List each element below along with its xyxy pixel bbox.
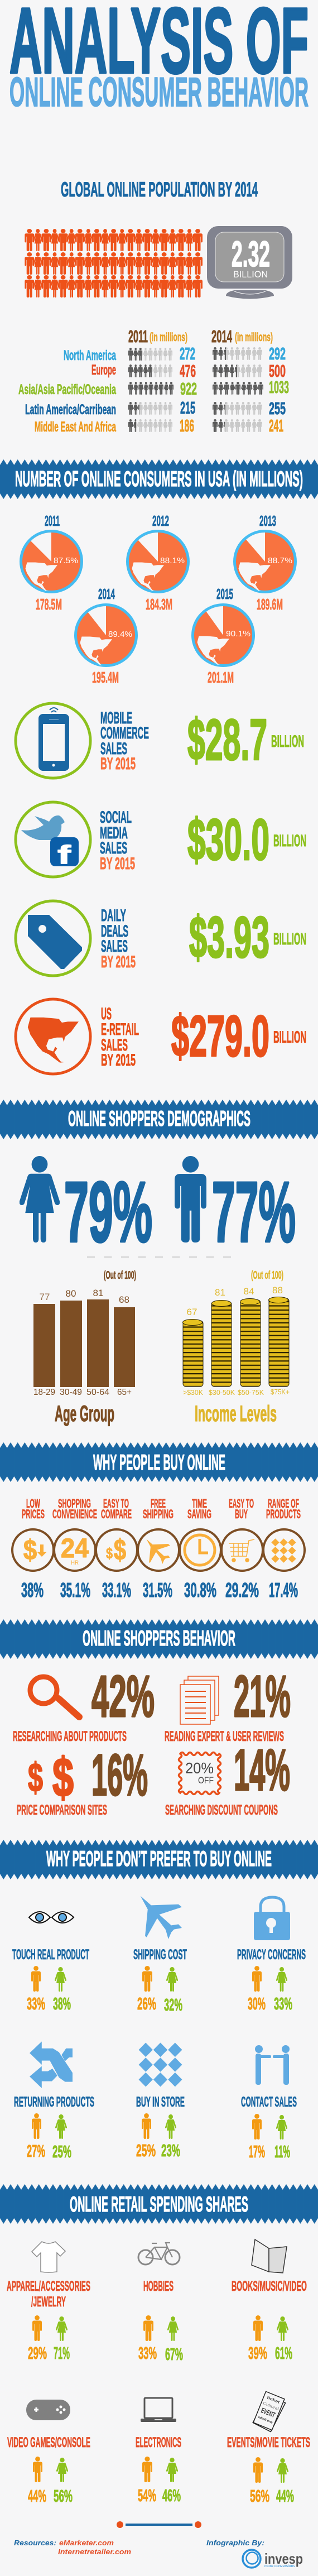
pie chart: 2012: 88.1% [160,556,185,565]
reason labels: BUY [235,1507,248,1521]
objection: buy in store: 23% [161,2141,180,2160]
stat: social media: SOCIAL [100,808,132,827]
objection: returning products: 25% [52,2142,71,2161]
banner: demographics [0,1100,318,1139]
pie chart: 2014: 2014 [98,586,115,602]
icon: tickets [252,2391,287,2433]
icon: coupon: 20% [185,1759,214,1777]
objection: returning products: 27% [27,2141,45,2161]
stat: social media: SALES [100,839,127,857]
objection: shipping cost [133,1896,187,2014]
icon: open book [252,2239,287,2273]
bar values: 80 [66,1288,76,1299]
bar chart: age group: Age Group [55,1402,114,1426]
reason percentages: 31.5% [143,1579,172,1601]
reason percentages: 33.1% [102,1579,131,1601]
icon: magnifier [30,1677,79,1717]
objection: touch real product: 38% [53,1994,71,2013]
age axis labels: 30-49 [60,1388,82,1397]
infographic: RETURNING PRODUCTS [14,2094,94,2110]
reason labels: TIME [192,1496,207,1510]
objection: buy in store [136,2043,185,2160]
chart: income levels coin stacks [183,1269,290,1426]
pictogram: rows of people [25,229,203,298]
stat: daily deals [16,901,306,976]
coin values [187,1285,283,1317]
bar values: 77 [40,1292,50,1302]
icon: documents [180,1676,219,1724]
icon: game controller [26,2400,70,2420]
reason percentages: 38% [21,1579,44,1601]
stat: women 79%: 79% [64,1164,152,1260]
stat: social media: BY 2015 [100,855,135,873]
reason labels: EASY TO [103,1496,129,1510]
icon: 24 hour: 24 [61,1534,89,1563]
income axis labels: >$30K [183,1388,203,1397]
stat: daily deals: DEALS [101,922,128,941]
row: Asia Pacific: 922 [180,379,197,399]
icon: 24 hour: HR [71,1560,79,1566]
behavior: researching 42%: 42% [91,1664,155,1729]
stat: mobile commerce: BY 2015 [100,755,136,773]
stat: social media: MEDIA [100,824,128,842]
pie chart: 2014: 195.4M [92,669,119,686]
reason percentages: 29.2% [225,1579,259,1601]
coin values: 67 [187,1307,197,1317]
icon: bird [21,816,65,840]
coin stacks [183,1297,289,1387]
column header 2011: 2011 [128,327,148,346]
icon: coupon [179,1753,221,1794]
stat: women 79% [20,1156,152,1260]
icon: tickets: admit one [257,2416,273,2425]
infographic: 16% [91,1743,148,1808]
column header 2014: (in millions) [235,331,273,344]
infographic: ELECTRONICS [136,2435,181,2450]
banner: why people buy online [0,1442,318,1482]
icon: smartphone [38,708,69,771]
icon: range of products [271,1538,296,1563]
banner: why people don't prefer [0,1840,318,1879]
income axis labels: $50-75K [238,1388,264,1397]
row: Europe [91,361,286,381]
icon: clock [185,1535,215,1565]
row: North America [64,344,286,363]
objection: privacy concerns: 33% [274,1994,292,2013]
banner: shoppers behavior [0,1619,318,1659]
icon: return arrows [30,2042,73,2088]
stat: men 77% [175,1156,296,1260]
column header 2011: (in millions) [150,331,187,344]
row: Latin America: 215 [180,398,195,418]
row: Asia Pacific [18,377,289,399]
bar chart: age group: (Out of 100) [104,1269,136,1282]
row: Middle East and Africa: 186 [180,416,194,435]
footer: resources: eMarketer.com [59,2539,114,2547]
footer divider [117,2521,201,2528]
stat: US e-retail: US [101,1005,112,1023]
category: video games [7,2400,90,2506]
icon: t-shirt [32,2242,65,2272]
reason labels: COMPARE [101,1507,132,1521]
reason percentages [21,1579,298,1601]
row: North America: North America [64,348,117,363]
category: events [227,2391,310,2506]
bar values: 68 [119,1294,129,1305]
reason labels: FREE [151,1496,166,1510]
objection: shipping cost: 32% [164,1995,182,2014]
icon: laptop [141,2398,176,2422]
reason icon circles [12,1529,305,1571]
icon: monitor 2.32 billion: BILLION [233,269,268,280]
bar values [40,1288,129,1305]
bar chart: age group [33,1269,136,1426]
reason labels: EASY TO [229,1496,254,1510]
stat: daily deals: DAILY [101,906,126,925]
infographic: APPAREL/ACCESSORIES [7,2278,90,2294]
infographic: BUY IN STORE [136,2094,185,2110]
icon: diamonds [139,2043,182,2086]
objection: privacy concerns [237,1897,306,2013]
icon: compare prices [106,1534,126,1566]
row: Middle East and Africa [35,416,283,435]
row: Europe: 500 [269,361,286,381]
category: apparel: 29% [28,2343,47,2363]
reason percentages: 30.8% [184,1579,216,1601]
icon: tickets: ticket [266,2396,281,2405]
row: Asia Pacific: 1033 [269,377,289,397]
pie chart: 2011: 178.5M [36,596,62,613]
reason labels: SAVING [187,1507,211,1521]
icon: monitor 2.32 billion: 2.32 [232,234,270,274]
icon: dollar signs [28,1747,74,1808]
category: hobbies: 33% [138,2343,157,2363]
pie chart: 2015: 2015 [216,586,233,602]
row: Latin America [25,398,286,418]
pie chart: 2013: 189.6M [257,596,283,613]
icon: plane [146,1539,170,1564]
pie chart: 2011: 87.5% [54,556,78,565]
stat: mobile commerce: COMMERCE [100,724,149,742]
pie chart: 2011 [21,512,81,613]
pie chart: 2015: 90.1% [226,629,250,639]
pie chart: 2012: 184.3M [146,596,172,613]
coin values: 84 [244,1286,254,1297]
pie chart: 2013 [234,512,296,613]
pie chart: 2015 [193,586,253,686]
objection: returning products [14,2041,94,2161]
row: Latin America: Latin America/Carribean [25,402,116,418]
icon: bicycle [138,2243,180,2265]
behavior: researching 42%: RESEARCHING ABOUT PRODUCTS [13,1729,127,1744]
column header 2011 [128,327,187,346]
pie chart: 2013: 88.7% [268,556,292,565]
stat: US e-retail: SALES [101,1036,128,1054]
stat: social media [16,802,306,877]
reason labels: SHOPPING [58,1496,91,1510]
icon: coupon: OFF [198,1775,214,1786]
stat: mobile commerce: SALES [100,740,127,758]
icon: compare prices: $ [106,1545,113,1562]
objection: touch real product: 33% [27,1994,45,2013]
category: electronics [136,2398,181,2505]
bar values: 81 [93,1288,103,1298]
stat: US e-retail [16,999,306,1074]
reason percentages: 35.1% [60,1579,90,1601]
age axis labels: 50-64 [86,1388,109,1397]
footer: credit and invesp logo: invesp [264,2550,303,2567]
banner: retail spending shares [0,2184,318,2224]
category: events: 56% [250,2486,269,2506]
category: events: 44% [276,2486,294,2506]
row: Latin America: 255 [269,399,286,418]
pie chart: 2013: 2013 [259,512,276,529]
objection: contact sales [241,2045,297,2161]
icon: north america map [28,1018,79,1063]
icon: low prices: $ [23,1534,37,1566]
age axis labels: 18-29 [33,1388,55,1397]
footer: credit and invesp logo: more conversions [264,2565,295,2568]
bars [33,1299,135,1387]
row: North America: 272 [180,344,195,363]
icon: dollar signs: $ [28,1755,43,1800]
category: books: 39% [248,2343,267,2363]
row: Middle East and Africa: 241 [269,416,283,435]
row: Middle East and Africa: Middle East And Africa [35,419,117,435]
objection: shipping cost: 26% [137,1994,156,2013]
reason labels: LOW [26,1496,40,1510]
age axis labels [33,1388,132,1397]
infographic: TOUCH REAL PRODUCT [12,1947,89,1963]
reason labels: CONVENIENCE [52,1507,97,1521]
objection: touch real product [12,1912,89,2013]
banner: number of online consumers [0,459,318,499]
pie chart: 2014 [76,586,136,686]
pie chart: 2012 [127,512,189,613]
icon: facebook [50,837,79,869]
icon: two people [255,2045,290,2085]
footer: resources: Resources: [14,2539,56,2547]
row: Europe: Europe [91,362,116,378]
income axis labels: $75K+ [271,1388,290,1396]
icon: plane [141,1896,182,1939]
infographic: SHIPPING COST [133,1947,187,1963]
stat: mobile commerce: MOBILE [100,709,132,727]
chart: income levels coin stacks: (Out of 100) [251,1269,283,1282]
behavior: price comparison 16%: PRICE COMPARISON SITES [17,1802,107,1818]
reason labels [22,1496,301,1521]
category: electronics: 54% [138,2486,156,2505]
pie chart: 2014: 89.4% [108,630,132,639]
icon: eyes [29,1912,74,1923]
footer: resources [14,2539,131,2556]
category: hobbies: HOBBIES [143,2278,174,2294]
footer: resources: Internetretailer.com [58,2548,131,2556]
stat: US e-retail: BY 2015 [101,1051,136,1069]
category: video games: 44% [28,2486,46,2506]
row: Europe: 476 [180,361,196,381]
icon: tickets: Cultural [262,2401,280,2411]
icon: facebook: f [57,840,71,869]
category: books: 61% [275,2343,292,2363]
age axis labels: 65+ [117,1388,132,1397]
stat: US e-retail: E-RETAIL [101,1020,139,1039]
category: apparel: /JEWELRY [31,2294,66,2310]
category: books [232,2239,307,2363]
icon: price tag [28,915,82,969]
category: apparel: 71% [54,2343,70,2363]
column header 2014 [211,327,273,346]
icon: padlock [254,1897,290,1940]
stat: daily deals: SALES [101,937,128,956]
icon: shopping cart [229,1539,254,1562]
row: Asia Pacific: Asia/Asia Pacific/Oceania [18,382,117,397]
footer: credit and invesp logo: Infographic By: [206,2539,264,2547]
category: hobbies [138,2243,183,2364]
category: electronics: 46% [162,2486,181,2505]
category: hobbies: 67% [165,2344,183,2364]
stat: daily deals: BY 2015 [101,953,136,971]
reason labels: PRICES [22,1507,45,1521]
table: online population by region [18,327,289,435]
stat: mobile commerce [16,703,304,778]
category: video games: 56% [54,2486,73,2506]
income axis labels [183,1388,290,1397]
pie chart: 2011: 2011 [45,512,60,529]
objection: privacy concerns: 30% [248,1994,266,2013]
row: North America: 292 [269,344,286,363]
pie chart: 2012: 2012 [152,512,169,529]
reason labels: SHIPPING [143,1507,174,1521]
behavior: reviews 21% [165,1664,291,1744]
icon: tickets: EVENT [260,2406,277,2419]
column header 2014: 2014 [211,327,232,346]
footer: credit and invesp logo [206,2539,303,2568]
behavior: coupons 14% [165,1738,290,1818]
infographic: VIDEO GAMES/CONSOLE [7,2435,90,2450]
icon: monitor 2.32 billion [207,226,292,299]
icon: dollar signs: $ [52,1747,74,1808]
pie chart: 2015: 201.1M [208,669,234,686]
objection: contact sales: 11% [274,2142,290,2161]
behavior: price comparison 16% [17,1743,148,1818]
objection: buy in store: 25% [136,2141,156,2160]
objection: contact sales: 17% [249,2142,265,2161]
income axis labels: $30-50K [209,1388,235,1397]
coin values: 88 [272,1285,283,1296]
icon: compare prices: $ [114,1534,126,1566]
coin values: 81 [215,1287,225,1298]
icon: low prices [23,1534,47,1566]
behavior: researching 42% [13,1664,155,1744]
category: apparel [7,2242,90,2363]
